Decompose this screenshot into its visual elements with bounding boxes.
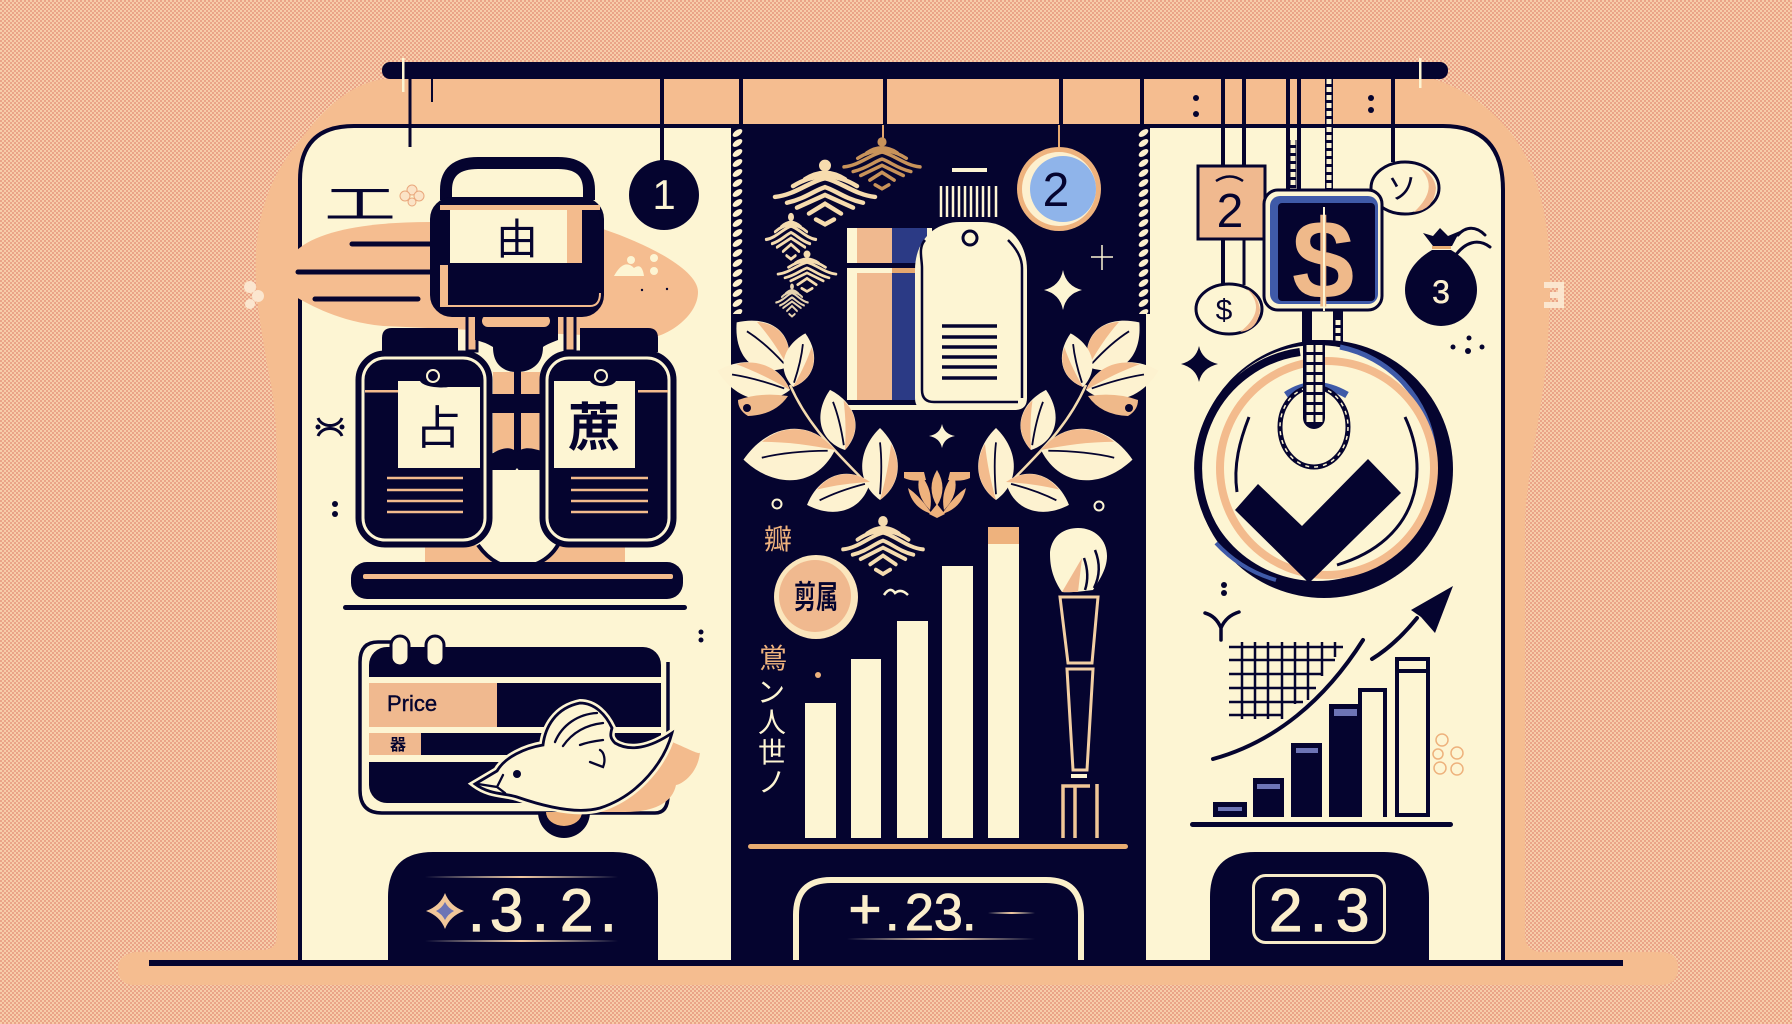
left label mark: 工 [324,183,396,227]
left jar: 占 [415,402,461,454]
swirl ornament [1433,734,1463,775]
Y mark [1205,612,1239,640]
bar chart [805,527,1019,838]
round seal: 剪属 [794,579,838,615]
result badge 2: . [962,884,976,942]
top product bag [432,163,602,315]
growth bar chart [1213,659,1428,817]
chart baseline [748,844,1128,849]
lotus ornament [904,470,970,518]
hanger lines and ropes [1223,79,1393,285]
panel 3: right comparison [1181,79,1490,962]
centre hanger lines [741,79,1142,126]
vertical glyph column: 鴬 [759,643,787,674]
bag dots [1450,336,1484,354]
price label: Price [387,691,437,716]
numbered square: 2 [1217,185,1243,238]
wreath left branch [713,306,898,522]
money bag [1405,228,1490,326]
book behind tag [847,228,932,410]
result badge 2: . [885,884,899,942]
check mark [1235,459,1401,583]
ring with check mark [1195,340,1453,598]
vertical glyph column: 人 [758,707,786,738]
makeup brush [1050,528,1107,838]
step badge 2 [1017,147,1101,231]
money bag: 3 [1432,274,1450,310]
grid [1229,642,1343,719]
bird [475,703,700,838]
rail dots [1193,95,1374,117]
result badge 3: 2.3 [1269,877,1369,944]
left rope [731,128,744,314]
step badge 2: 2 [1043,164,1069,217]
patterned diamonds [766,137,923,574]
speed lines [298,244,432,299]
numbered square [1198,166,1265,239]
ring hook [1280,340,1348,467]
shelf base [343,562,687,610]
dollar sign card: $ [1292,197,1354,322]
round seal [774,555,858,639]
side ornaments [316,418,704,642]
peach hangers [883,125,1059,147]
peach backdrop blob and floor strip [118,79,1678,985]
lower coin: $ [1216,294,1233,327]
top product bag: 由 [496,216,538,263]
floor line [149,960,1623,966]
growth curve [1213,640,1363,759]
right rope [1137,128,1150,314]
barcode [941,170,996,217]
sparkles [929,245,1113,448]
step badge 1 [629,160,699,230]
rope to ring [1302,311,1343,356]
outer cream ornaments [244,281,1564,309]
upper coin [1371,162,1439,214]
vertical glyph column: ノ [758,767,786,798]
small accents [815,590,908,678]
result badge 1: .3.2. [468,877,617,944]
result badge 2: 23 [905,884,963,942]
panel 1: left comparison [296,79,741,960]
cloud speckles [614,254,668,291]
result badge 2 [796,877,1081,960]
result badge 1 [388,852,658,960]
vertical glyph column [757,643,787,798]
price card [360,636,668,813]
chart baseline [1190,822,1453,827]
right jar: 蔗 [568,400,620,458]
small flower ornament [400,185,424,206]
connectors between the jars [425,315,625,568]
cream panel frame [300,126,1503,962]
peach glyph label: 瓣 [764,524,792,555]
laurel wreath [713,306,1163,522]
lower coin [1196,284,1262,334]
vertical glyph column: ン [757,677,785,708]
small rings [772,500,1104,510]
step badge 1: 1 [652,171,676,218]
dollar sign card [1264,190,1382,322]
small glyph label: 器 [390,736,406,754]
hanging rail [382,58,1448,92]
right jar [541,328,675,546]
result badge 3 [1210,852,1429,962]
left jar [357,328,491,546]
peach cloud behind jars [296,222,698,338]
tag text lines [942,326,997,378]
panel 2: dark centre comparison [713,79,1163,961]
small dots [1221,582,1227,596]
wreath right branch [978,306,1163,522]
growth arrow [1372,586,1453,659]
result badge 2: + [849,877,881,940]
upper coin: ソ [1387,173,1417,206]
dark sparkle [1181,346,1218,382]
price tag [915,222,1027,410]
vertical glyph column: 世 [758,737,786,768]
hanger lines [410,79,741,165]
